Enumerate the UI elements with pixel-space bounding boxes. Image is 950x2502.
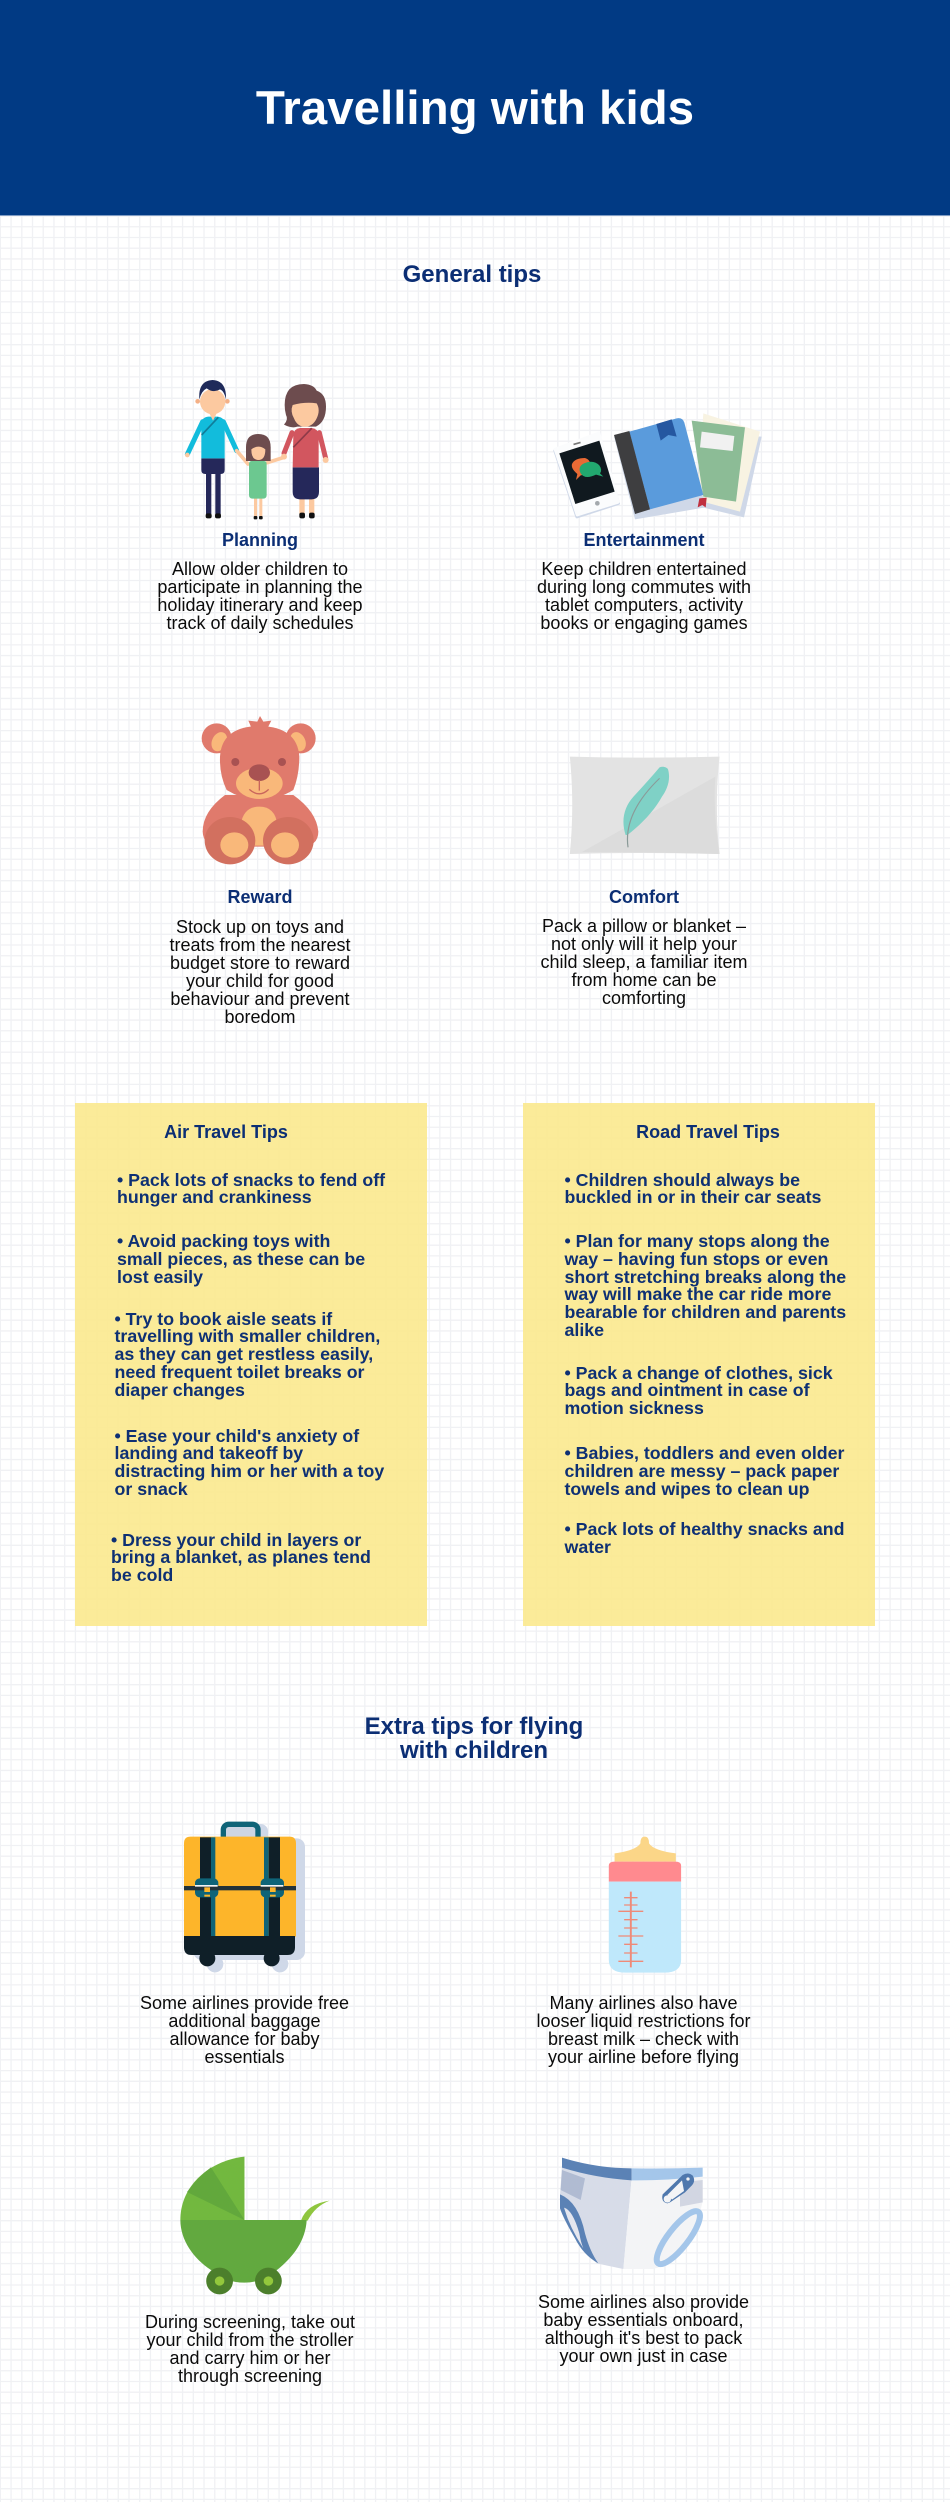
text: baggage allowance: Some airlines provide free [140,1993,349,2013]
icon: pillow with feather [570,756,720,854]
text: baggage allowance [140,1993,349,2067]
text: comfort body: from home can be [571,970,717,990]
air tip 3: diaper changes [114,1380,245,1400]
road tip 1: • Children should always be [564,1170,800,1190]
road tip 2: way will make the car ride more [564,1284,831,1304]
text: comfort body: not only will it help your [551,934,737,954]
icon: baby bottle [608,1836,682,1973]
road tip 3: bags and ointment in case of [564,1380,810,1400]
air tip 3: need frequent toilet breaks or [114,1362,364,1382]
road tip 3: • Pack a change of clothes, sick [564,1362,833,1382]
air tip 1 [117,1170,386,1207]
air tip 5: • Dress your child in layers or [111,1530,361,1550]
air tip 3: as they can get restless easily, [114,1344,373,1364]
road tip 1: buckled in or in their car seats [564,1187,821,1207]
heading: extra tips for flying [365,1713,583,1764]
road tip 4: children are messy – pack paper [564,1461,839,1481]
road tip 5: • Pack lots of healthy snacks and [564,1519,844,1539]
text: comfort body: child sleep, a familiar item [540,952,748,972]
text: onboard essentials: your own just in case [559,2346,728,2366]
icon: suitcase [184,1822,305,1972]
road tip 1 [564,1170,821,1207]
road tip 2: way – having fun stops or even [564,1249,828,1269]
air tip 2: small pieces, as these can be [117,1249,365,1269]
text: comfort body [540,916,748,1008]
road tip 5 [564,1519,844,1557]
text: planning body [157,559,363,633]
road tip 5: water [564,1537,611,1557]
icon: phone and books [553,414,762,520]
text: stroller screening [145,2312,355,2386]
text: entertainment body: books or engaging games [540,613,748,633]
text: reward body: boredom [224,1007,296,1027]
text: baggage allowance: allowance for baby [169,2029,320,2049]
road tip 4: • Babies, toddlers and even older [564,1443,844,1463]
text: entertainment body: during long commutes with [537,577,751,597]
heading: extra tips for flying: Extra tips for flying [365,1713,583,1740]
air tip 1: hunger and crankiness [117,1187,312,1207]
air tip 4: or snack [114,1479,188,1499]
panel: air travel tips [75,1103,427,1626]
air tip 5: be cold [111,1565,173,1585]
air tip 4 [114,1426,384,1499]
text: liquid restrictions [536,1993,751,2067]
text: entertainment body: Keep children entertained [541,559,747,579]
air tip 4: distracting him or her with a toy [114,1461,384,1481]
air tip 5: bring a blanket, as planes tend [111,1547,371,1567]
text: reward body: budget store to reward [170,953,350,973]
road travel heading: Road Travel Tips [636,1122,780,1142]
text: stroller screening: During screening, take out [145,2312,355,2332]
road tip 2: alike [564,1320,604,1340]
road tip 2 [564,1231,846,1340]
text: onboard essentials: Some airlines also provide [538,2292,749,2312]
icon: teddy bear [202,716,318,864]
text: reward body: behaviour and prevent [170,989,350,1009]
text: comfort: Comfort [609,887,679,907]
air tip 5 [111,1530,371,1585]
road tip 2: bearable for children and parents [564,1302,846,1322]
air tip 2: • Avoid packing toys with [117,1231,330,1251]
text: planning: Planning [222,530,298,550]
air tip 4: landing and takeoff by [114,1443,303,1463]
icon: diaper [560,2158,703,2269]
text: onboard essentials: although it's best to pack [545,2328,742,2348]
text: reward: Reward [227,887,293,907]
road tip 2: short stretching breaks along the [564,1267,846,1287]
text: entertainment: Entertainment [583,530,705,550]
text: planning body: holiday itinerary and keep [157,595,363,615]
text: stroller screening: and carry him or her [169,2348,331,2368]
text: planning body: track of daily schedules [166,613,354,633]
text: onboard essentials: baby essentials onboard, [543,2310,744,2330]
heading: general tips: General tips [403,261,541,288]
air tip 3 [114,1308,380,1400]
text: baggage allowance: essentials [204,2047,285,2067]
road tip 4 [564,1443,844,1499]
text: stroller screening: your child from the stroller [146,2330,354,2350]
text: reward body: Stock up on toys and [176,917,344,937]
text: planning body: participate in planning the [157,577,363,597]
text: liquid restrictions: breast milk – check with [548,2029,739,2049]
road tip 4: towels and wipes to clean up [564,1479,810,1499]
air tip 2 [117,1231,365,1287]
text: reward body [169,917,351,1027]
text: reward body: treats from the nearest [169,935,351,955]
road tip 3: motion sickness [564,1398,704,1418]
text: liquid restrictions: your airline before flying [548,2047,739,2067]
text: baggage allowance: additional baggage [168,2011,321,2031]
heading: extra tips for flying: with children [400,1737,548,1764]
text: comfort body: comforting [602,988,686,1008]
air tip 3: • Try to book aisle seats if [114,1308,332,1328]
text: stroller screening: through screening [178,2366,322,2386]
title: Travelling with kids [256,82,694,135]
road tip 2: • Plan for many stops along the [564,1231,830,1251]
panel: road travel tips [523,1103,875,1626]
text: comfort body: Pack a pillow or blanket – [542,916,746,936]
text: planning body: Allow older children to [172,559,348,579]
air tip 3: travelling with smaller children, [114,1326,380,1346]
icon: family [184,380,329,520]
air tip 4: • Ease your child's anxiety of [114,1426,359,1446]
icon: stroller [180,2156,330,2294]
air travel heading: Air Travel Tips [164,1122,288,1142]
header banner [0,0,950,216]
text: entertainment body: tablet computers, activity [545,595,743,615]
text: liquid restrictions: looser liquid restrictions for [536,2011,751,2031]
text: liquid restrictions: Many airlines also have [549,1993,738,2013]
text: onboard essentials [538,2292,749,2366]
road tip 3 [564,1362,833,1418]
air tip 2: lost easily [117,1267,203,1287]
air tip 1: • Pack lots of snacks to fend off [117,1170,385,1190]
text: entertainment body [537,559,751,633]
text: reward body: your child for good [186,971,334,991]
